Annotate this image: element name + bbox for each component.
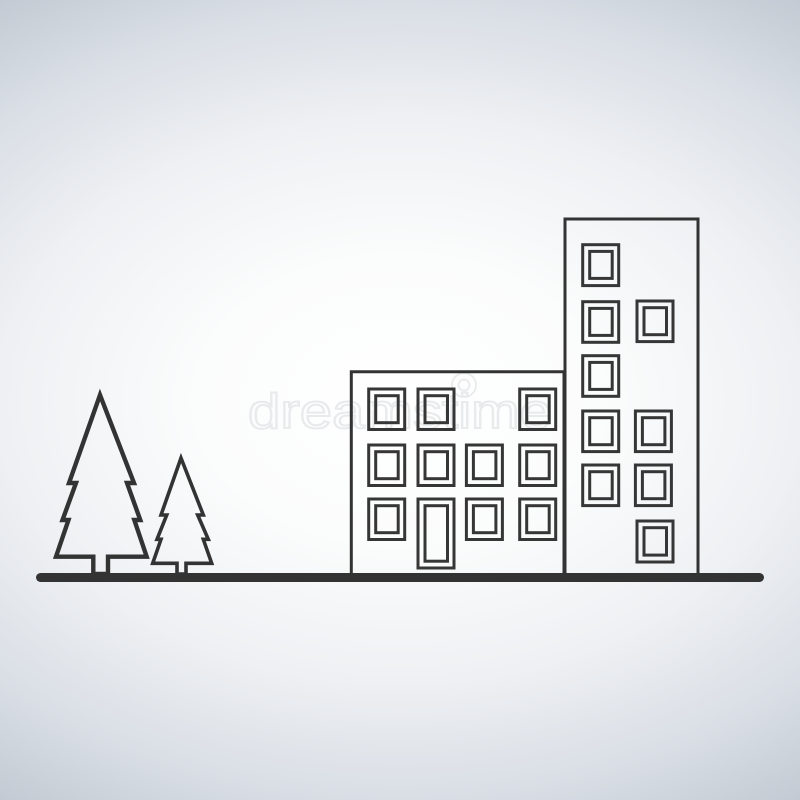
tower windows: right column <box>635 301 673 562</box>
windows: bottom row <box>369 499 556 540</box>
windows: middle row <box>369 445 556 486</box>
tower windows: left column <box>583 245 619 506</box>
tower building <box>565 219 698 574</box>
tower outline <box>565 219 698 574</box>
icon: small pine tree <box>153 458 212 574</box>
ground line <box>36 573 764 582</box>
building outline <box>351 372 564 574</box>
watermark <box>248 373 552 439</box>
icon: large pine tree <box>56 395 147 574</box>
low-rise building <box>351 372 564 574</box>
door <box>418 499 454 568</box>
watermark: dreamstime <box>248 385 552 439</box>
windows: top row <box>369 389 556 430</box>
